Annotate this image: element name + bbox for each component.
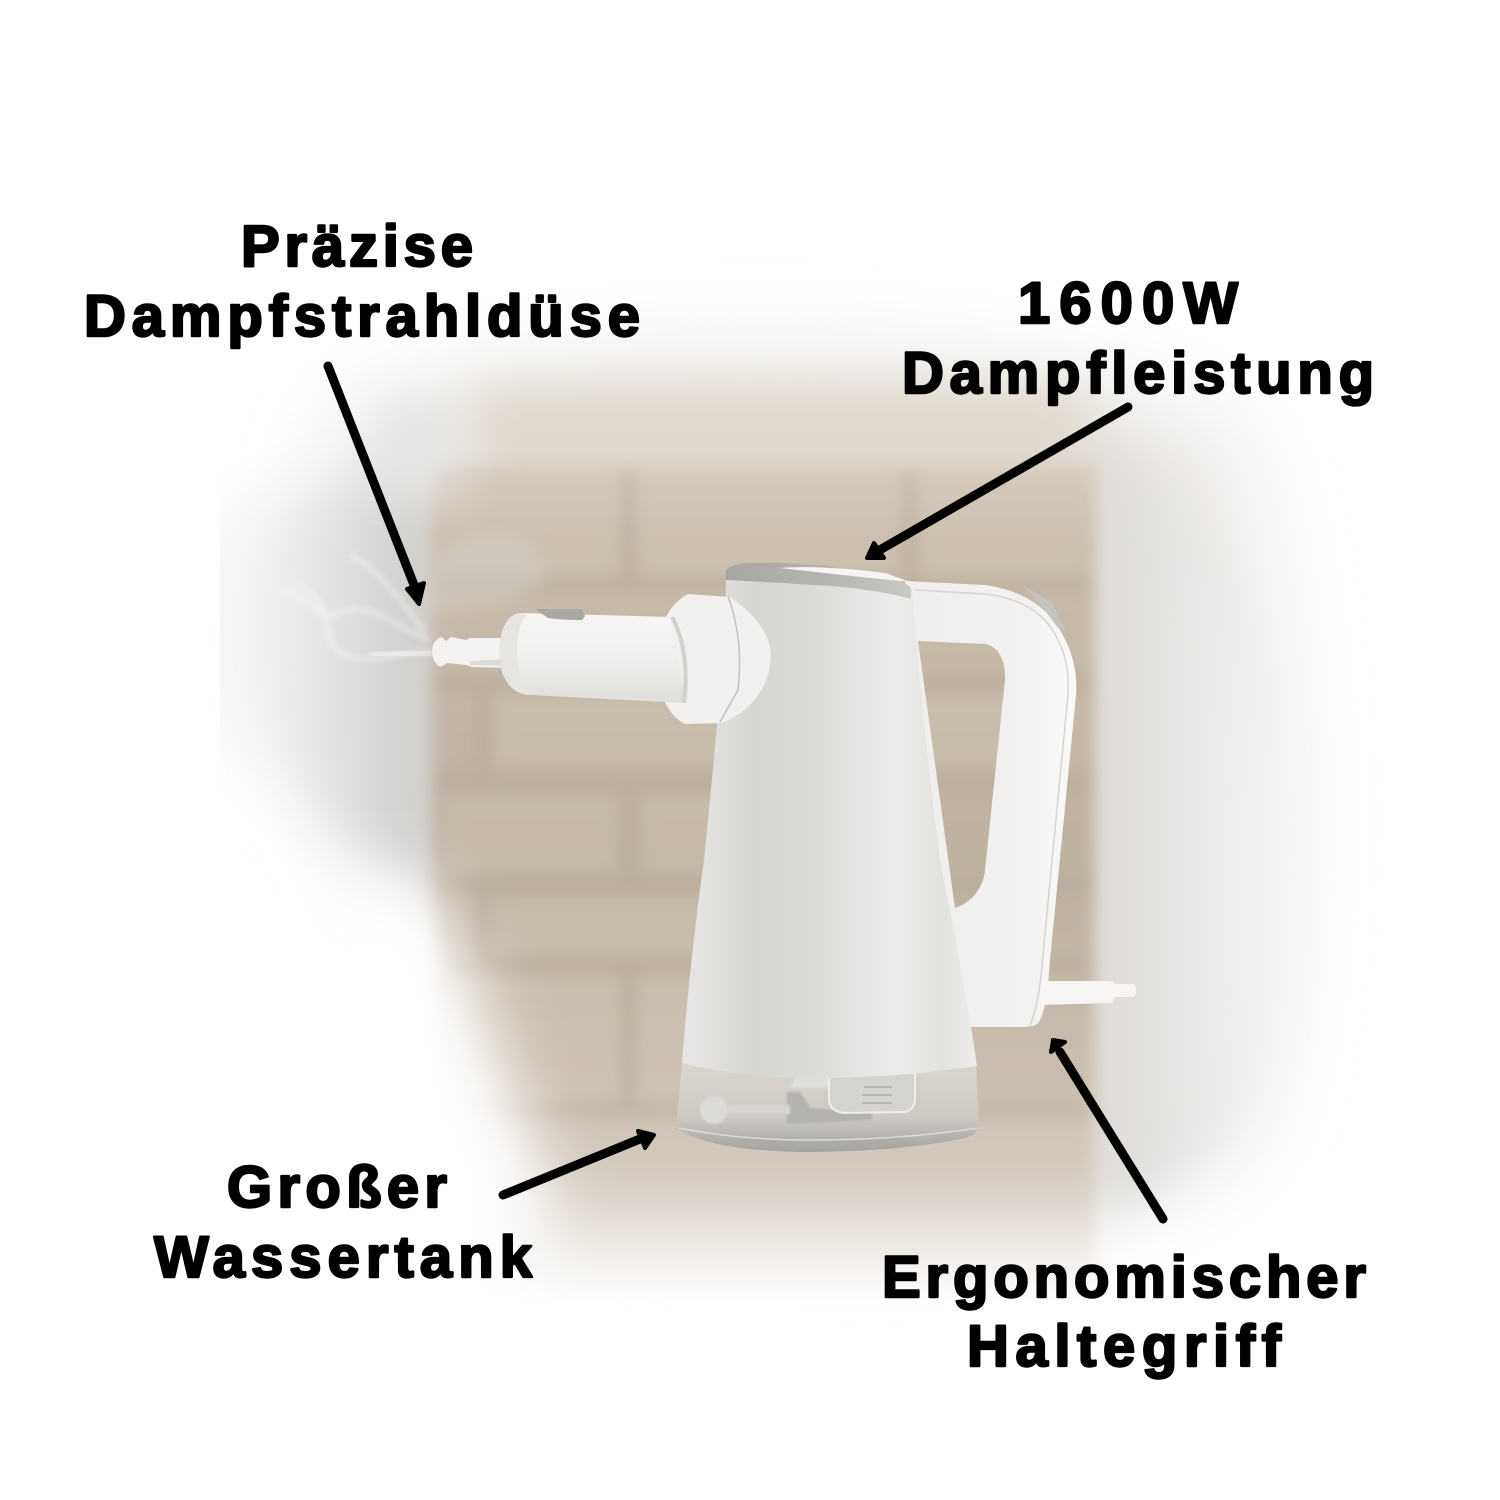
callout: 1600W Dampfleistung: [902, 271, 1374, 406]
pin at the handle base: [1040, 981, 1136, 1005]
brick wall: [432, 465, 1096, 1300]
collar: [657, 594, 771, 724]
steam nozzle arm: [432, 594, 771, 724]
callout: Großer Wassertank: Wassertank: [154, 1225, 533, 1290]
water tank: [677, 1062, 979, 1152]
callout: Präzise Dampfstrahldüse: [84, 214, 640, 349]
cylinder: [500, 613, 685, 703]
soft fade on wall top-left corner: [380, 400, 460, 490]
arrow to tank: [503, 1131, 654, 1195]
callout: Großer Wassertank: [154, 1155, 533, 1290]
handle: [905, 581, 1076, 1027]
lighter brick faces: [445, 480, 1085, 1100]
arrow to nozzle: [328, 366, 424, 604]
upper wall fading out: [470, 385, 1090, 505]
white fade over the lower-left wall: [330, 870, 550, 1340]
callout: Ergonomischer Haltegriff: Haltegriff: [967, 1314, 1282, 1379]
callout: 1600W Dampfleistung: 1600W: [1018, 271, 1238, 336]
arrow to lid: [867, 407, 1128, 558]
callout: 1600W Dampfleistung: Dampfleistung: [902, 341, 1374, 406]
arrow to handle: [1051, 1040, 1163, 1219]
product: handheld steam cleaner: [432, 563, 1136, 1152]
right pale haze: [1090, 430, 1289, 1220]
callout: Ergonomischer Haltegriff: [882, 1245, 1366, 1379]
broad pale haze behind everything: [300, 354, 1284, 1236]
lid with silver ring: [726, 563, 911, 599]
mortar lines: [436, 470, 1090, 1110]
nozzle tip: [432, 637, 515, 668]
steam plume: [285, 532, 545, 658]
infographic canvas: [86, 222, 1372, 1380]
callout: Präzise Dampfstrahldüse: Präzise: [241, 214, 473, 279]
left grey haze: [220, 478, 436, 905]
callout: Großer Wassertank: Großer: [227, 1155, 447, 1220]
callout: Ergonomischer Haltegriff: Ergonomischer: [882, 1245, 1366, 1310]
main body: [682, 575, 977, 1078]
button: [535, 609, 585, 620]
blurred background: wall and steam haze: [190, 354, 1289, 1340]
callout: Präzise Dampfstrahldüse: Dampfstrahldüse: [84, 284, 640, 349]
